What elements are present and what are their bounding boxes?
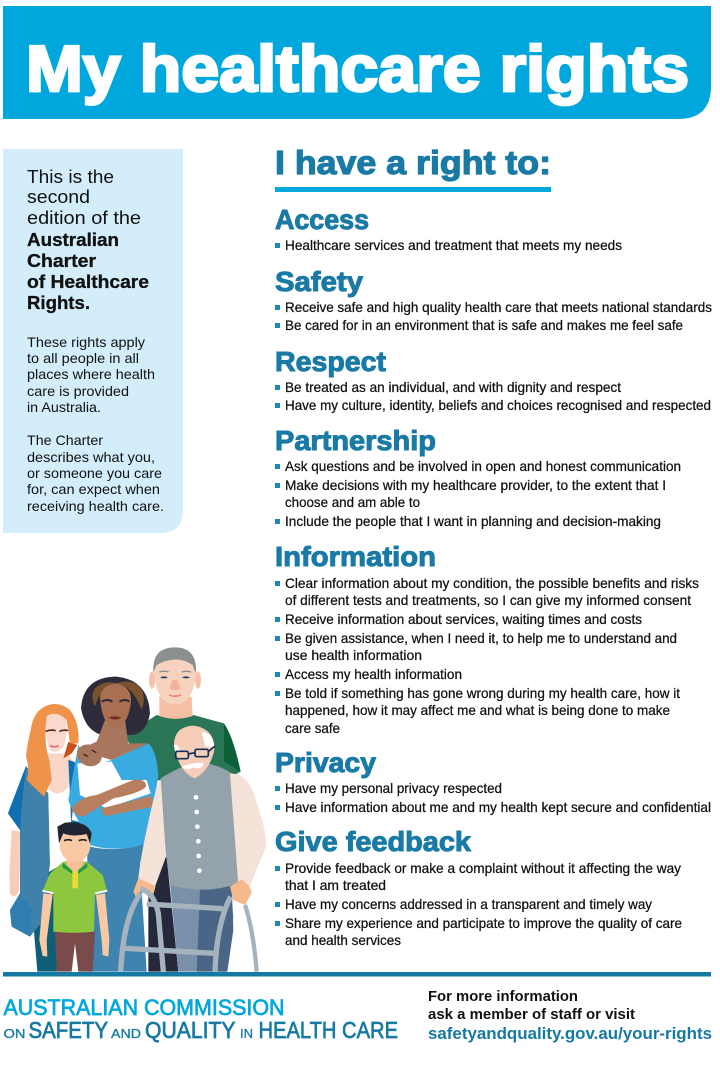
logo: Australian Commission: SAFETY: [28, 1017, 108, 1043]
section: Privacy: Have my personal privacy respected: [285, 781, 502, 796]
section: Information: [275, 541, 699, 736]
section: Partnership: choose and am able to: [285, 495, 420, 510]
intro text: [27, 167, 149, 313]
intro text: edition of the: [27, 208, 141, 228]
intro text: Charter: [27, 251, 96, 271]
charter description text: The Charter: [27, 433, 103, 448]
scope text: care is provided: [27, 384, 129, 399]
logo: Australian Commission: AND: [111, 1027, 141, 1041]
scope text: in Australia.: [27, 400, 101, 415]
contact information: ask a member of staff or visit: [428, 1006, 635, 1023]
section: Access: Access: [275, 204, 369, 235]
scope text: [27, 335, 155, 415]
section: Give feedback: and health services: [285, 933, 401, 948]
figure: older man with walker: [121, 726, 266, 972]
section: Access: Healthcare services and treatment that meets my needs: [285, 238, 622, 253]
section: Information: Access my health information: [285, 667, 462, 682]
footer divider: [3, 972, 711, 976]
section: Information: Clear information about my condition, the possible benefits and risks: [285, 576, 699, 591]
heading: I have a right to: I have a right to:: [275, 144, 551, 181]
section: Information: care safe: [285, 721, 340, 736]
illustration: group of people: [8, 647, 266, 972]
scope text: places where health: [27, 367, 155, 382]
logo: Australian Commission: HEALTH CARE: [258, 1017, 398, 1043]
section: Partnership: Partnership: [275, 425, 436, 456]
section: Partnership: Ask questions and be involved in open and honest communication: [285, 459, 681, 474]
intro text: This is the: [27, 167, 114, 187]
intro text: Rights.: [27, 293, 90, 313]
intro text: of Healthcare: [27, 272, 149, 292]
section: Access: [275, 204, 622, 253]
section: Partnership: Make decisions with my healthcare provider, to the extent that I: [285, 478, 666, 493]
logo: Australian Commission: [4, 995, 398, 1043]
section: Give feedback: Share my experience and participate to improve the quality of care: [285, 916, 682, 931]
section: Privacy: Privacy: [275, 747, 376, 778]
section: Give feedback: Give feedback: [275, 826, 471, 857]
logo: Australian Commission: ON: [4, 1027, 26, 1041]
section: Respect: Be treated as an individual, and with dignity and respect: [285, 380, 621, 395]
scope text: These rights apply: [27, 335, 145, 350]
charter description text: or someone you care: [27, 466, 162, 481]
section: Privacy: Have information about me and my health kept secure and confidential: [285, 800, 711, 815]
section: Safety: [275, 266, 712, 333]
section: Information: happened, how it may affect me and what is being done to make: [285, 703, 670, 718]
section: Respect: Respect: [275, 346, 386, 377]
banner: [3, 6, 711, 119]
logo: Australian Commission: AUSTRALIAN COMMISSION: [4, 995, 284, 1020]
intro text: second: [27, 187, 90, 207]
figure: woman with red hair: [8, 704, 83, 972]
section: Information: Be told if something has gone wrong during my health care, how it: [285, 686, 680, 701]
charter description text: receiving health care.: [27, 499, 164, 514]
figure: man in green: [124, 647, 241, 787]
section: Safety: Safety: [275, 266, 363, 297]
contact information: [428, 988, 712, 1043]
logo: Australian Commission: QUALITY: [145, 1017, 236, 1043]
section: Partnership: Include the people that I want in planning and decision-making: [285, 514, 661, 529]
section: Information: Receive information about services, waiting times and costs: [285, 612, 642, 627]
charter description text: for, can expect when: [27, 482, 160, 497]
glasses: [176, 746, 215, 759]
title: My healthcare rights: [26, 32, 689, 105]
section: Give feedback: Provide feedback or make a complaint without it affecting the way: [285, 861, 681, 876]
section: Give feedback: [275, 826, 682, 948]
section: Give feedback: Have my concerns addressed in a transparent and timely way: [285, 897, 652, 912]
vest buttons: [194, 795, 202, 873]
section: Give feedback: that I am treated: [285, 878, 386, 893]
intro text: Australian: [27, 230, 119, 250]
logo: Australian Commission: IN: [240, 1027, 253, 1041]
figure: boy in green shirt: [39, 822, 109, 972]
charter description text: [27, 433, 164, 514]
section: Information: of different tests and treatments, so I can give my informed consent: [285, 593, 691, 608]
section: Information: use health information: [285, 648, 422, 663]
walker: [121, 889, 257, 972]
panel: about the charter: [3, 149, 183, 533]
section: Information: Information: [275, 541, 436, 572]
figure: woman holding baby: [68, 677, 158, 972]
scope text: to all people in all: [27, 351, 139, 366]
section: Respect: Have my culture, identity, beliefs and choices recognised and respected: [285, 398, 711, 413]
section: Safety: Receive safe and high quality health care that meets national standards: [285, 300, 712, 315]
contact information: For more information: [428, 988, 578, 1005]
section: Safety: Be cared for in an environment that is safe and makes me feel safe: [285, 318, 683, 333]
section: Respect: [275, 346, 711, 413]
charter description text: describes what you,: [27, 450, 155, 465]
section: Partnership: [275, 425, 681, 529]
contact information: safetyandquality.gov.au/your-rights: [428, 1025, 712, 1043]
section: Privacy: [275, 747, 711, 815]
section: Information: Be given assistance, when I need it, to help me to understand and: [285, 631, 677, 646]
